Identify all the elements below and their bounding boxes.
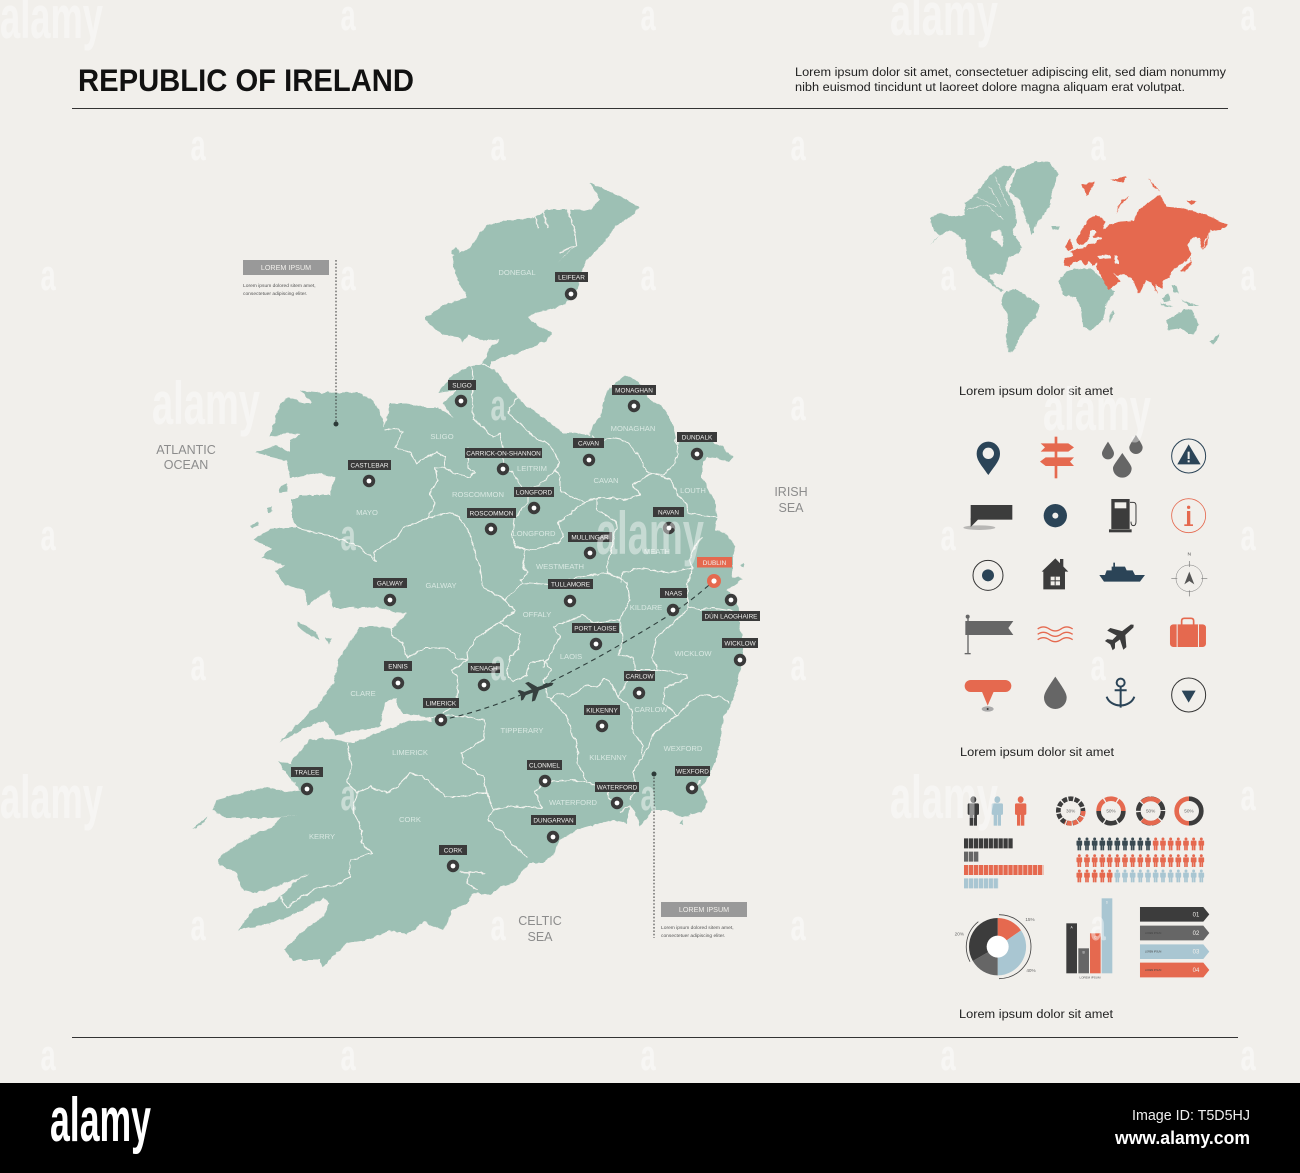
pin: Navan: NAVAN [658, 510, 679, 516]
footer image id: Image ID: T5D5HJ [1132, 1107, 1250, 1124]
caption: world map: Lorem ipsum dolor sit amet [959, 384, 1114, 398]
icon: info [1172, 499, 1206, 533]
stock watermarks: a [191, 900, 206, 950]
county labels: LIMERICK [392, 748, 428, 757]
numbered arrow list: 04 [1193, 968, 1200, 974]
pin: Carlow [624, 671, 655, 699]
county labels: LOUTH [680, 486, 706, 495]
world map [930, 162, 1228, 352]
pin: Naas: NAAS [665, 590, 682, 598]
county labels: WESTMEATH [536, 562, 584, 571]
pin: Tralee [291, 767, 323, 795]
inland seas [1097, 255, 1119, 265]
pin: Roscommon: ROSCOMMON [470, 510, 514, 518]
stock watermarks: a [491, 640, 506, 690]
header description text: Lorem ipsum dolor sit amet, consectetuer adipiscing elit, sed diam nonummy [795, 65, 1227, 79]
county labels [309, 268, 712, 841]
icon: ship [1099, 563, 1145, 582]
stock watermarks: alamy [596, 500, 704, 567]
ring chart: 50% [1099, 799, 1123, 823]
islands [192, 247, 744, 829]
pin: Mullingar [568, 532, 612, 559]
numbered arrow list: 03 [1193, 950, 1200, 956]
stock watermarks: alamy [1043, 376, 1151, 443]
numbered arrow list: LOREM IPSUM [1145, 933, 1161, 935]
pin: Monaghan: MONAGHAN [615, 388, 653, 394]
sea labels: OCEAN [164, 458, 208, 472]
county labels: CARLOW [634, 705, 668, 714]
coastal inlets [460, 212, 700, 890]
icon: signpost [1040, 437, 1074, 478]
stock watermarks: a [1241, 250, 1256, 300]
stock watermarks: a [941, 250, 956, 300]
plane on route [516, 674, 557, 705]
icon: target [973, 560, 1003, 590]
icon: suitcase [1170, 618, 1206, 647]
ring chart: 50% alternate: 50% [1146, 809, 1155, 814]
segmented bars [964, 843, 1043, 883]
pin: Dun Laoghaire: DÚN LAOGHAIRE [705, 612, 757, 620]
pin: Wexford: WEXFORD [676, 768, 709, 776]
pin: Leifear [555, 272, 588, 300]
pie chart [955, 915, 1036, 979]
pin: Cavan: CAVAN [578, 440, 599, 448]
county borders [280, 364, 738, 908]
column chart: A [1071, 926, 1074, 930]
pin: Carrick-on-Shannon [465, 448, 542, 475]
pin: Dungarvan [531, 815, 576, 843]
pin: Tralee: TRALEE [295, 770, 319, 776]
pin: Dublin (capital) [697, 557, 732, 588]
pin: Naas [660, 588, 687, 616]
icon: house [1042, 558, 1068, 589]
stock watermarks: a [641, 1030, 656, 1080]
flight route [441, 581, 714, 720]
sea labels: CELTIC [518, 914, 562, 928]
county labels: CAVAN [593, 476, 619, 485]
pin: Clonmel [527, 760, 562, 787]
pin: Port Laoise [572, 623, 619, 650]
city pins [291, 272, 760, 872]
pin: Cork [439, 845, 467, 872]
column chart: D [1106, 901, 1109, 905]
column chart: LOREM IPSUM [1080, 976, 1101, 980]
infographics set [955, 796, 1209, 980]
pin: Dublin (capital): DUBLIN [703, 560, 727, 567]
landmass [213, 183, 743, 968]
ring chart: 50% alternate [1138, 799, 1163, 823]
county labels: CORK [399, 815, 421, 824]
numbered arrow list: LOREM IPSUM [1145, 952, 1161, 954]
caption: icons: Lorem ipsum dolor sit amet [960, 745, 1115, 759]
icon: down arrow [1172, 678, 1206, 712]
icon: waves [1038, 627, 1073, 642]
stock watermarks: a [1241, 1030, 1256, 1080]
pie chart: 20% [955, 932, 964, 937]
pin: Galway [373, 578, 407, 606]
stock watermarks: a [191, 640, 206, 690]
icon: warning [1172, 439, 1206, 473]
stock watermarks: alamy [890, 764, 998, 831]
stock watermarks: a [1241, 770, 1256, 820]
pin: Cavan [573, 438, 604, 466]
pin: Nenagh: NENAGH [470, 666, 498, 672]
stock watermarks: a [791, 380, 806, 430]
footer logo: alamy [50, 1086, 151, 1155]
pin: Waterford: WATERFORD [597, 784, 638, 792]
county labels: WATERFORD [549, 798, 598, 807]
stock watermarks: a [41, 1030, 56, 1080]
icon: disc [1044, 504, 1067, 527]
pie chart: 40% [1026, 968, 1036, 973]
pin: Limerick [423, 698, 459, 726]
people pictogram [1076, 838, 1204, 882]
icon: compass [1171, 552, 1207, 596]
header description text: nibh euismod tincidunt ut laoreet dolore magna aliquam erat volutpat. [795, 80, 1185, 94]
stock watermarks: a [191, 120, 206, 170]
icon grid [963, 435, 1207, 712]
icon: anchor [1107, 679, 1134, 708]
stock watermarks: a [41, 510, 56, 560]
madagascar [1108, 310, 1114, 322]
sea labels: SEA [778, 501, 804, 515]
sea labels: IRISH [774, 485, 808, 499]
callout: south: Lorem ipsum dolored sitem amet, [661, 925, 734, 931]
pin: Port Laoise: PORT LAOISE [574, 626, 617, 632]
county labels: DONEGAL [498, 268, 536, 277]
icon: map marker [965, 680, 1011, 712]
pin: Longford [514, 487, 554, 514]
ring chart: 50% split: 50% [1184, 809, 1194, 814]
county labels: LAOIS [560, 652, 582, 661]
gender figures [968, 796, 1026, 826]
county labels: MEATH [644, 547, 670, 556]
title: REPUBLIC OF IRELAND [78, 62, 414, 98]
pin: Nenagh [468, 663, 500, 691]
pin: Clonmel: CLONMEL [529, 762, 560, 770]
map: Republic of Ireland [192, 183, 744, 968]
caption: infographics: Lorem ipsum dolor sit amet [959, 1007, 1114, 1021]
stock watermarks: a [41, 250, 56, 300]
iceland [1052, 226, 1060, 230]
pin: Castlebar [348, 460, 391, 487]
pin: Waterford [595, 782, 639, 809]
australia and oceania [1152, 285, 1220, 344]
pie chart: 15% [1025, 917, 1035, 922]
stock watermarks: a [941, 1030, 956, 1080]
arctic and island territories [1065, 177, 1208, 272]
ring chart: 50%: 50% [1106, 809, 1116, 814]
icon: airplane [1101, 615, 1142, 655]
pin: Sligo: SLIGO [452, 382, 472, 390]
numbered arrow list: LOREM IPSUM [1145, 970, 1161, 972]
icon: compass: N [1188, 552, 1192, 558]
sea labels: ATLANTIC [156, 443, 216, 457]
icon: location pin [977, 442, 1000, 475]
county labels: WEXFORD [664, 744, 703, 753]
pin: Tullamore [548, 579, 593, 607]
pin: Wexford [675, 766, 710, 794]
stock watermarks: a [1091, 640, 1106, 690]
icon: flag [965, 615, 1013, 654]
county labels: SLIGO [430, 432, 454, 441]
stock watermarks: alamy [152, 370, 260, 437]
header description text [795, 65, 1227, 94]
eurasia [1064, 195, 1228, 294]
county labels: CLARE [350, 689, 376, 698]
column chart [1066, 898, 1112, 980]
pin: Dun Laoghaire [702, 594, 760, 621]
pin: Longford: LONGFORD [516, 490, 552, 496]
footer bar [0, 1083, 1300, 1173]
stock watermarks: alamy [0, 764, 103, 831]
ring chart: 30% [1058, 799, 1083, 823]
column chart: C [1094, 936, 1097, 940]
callout: south [652, 772, 747, 939]
county labels: WICKLOW [674, 649, 712, 658]
county labels: MAYO [356, 508, 378, 517]
stock watermarks: a [341, 770, 356, 820]
icon: fuel pump [1109, 499, 1136, 532]
county labels: OFFALY [523, 610, 551, 619]
pin: Dungarvan: DUNGARVAN [533, 818, 574, 824]
county labels: KILKENNY [589, 753, 627, 762]
pin: Carrick-on-Shannon: CARRICK-ON-SHANNON [466, 450, 541, 458]
pin: Dundalk: DUNDALK [682, 434, 713, 442]
ring chart: 30%: 30% [1066, 809, 1075, 814]
pin: Monaghan [612, 385, 656, 412]
north america [930, 165, 1022, 293]
africa [1058, 268, 1115, 331]
stock watermarks: a [791, 900, 806, 950]
stock watermarks: a [341, 250, 356, 300]
numbered arrow list [1140, 907, 1209, 977]
stock watermarks: a [791, 640, 806, 690]
callout: north [243, 260, 338, 426]
stock watermarks: a [791, 120, 806, 170]
column chart: B [1083, 951, 1086, 955]
pin: Wicklow: WICKLOW [724, 640, 757, 648]
ring chart: 50% split [1177, 799, 1201, 823]
numbered arrow list: 02 [1193, 931, 1200, 937]
stock watermarks: a [491, 380, 506, 430]
pin: Kilkenny: KILKENNY [586, 708, 619, 714]
callout: north: Lorem ipsum dolored sitem amet, [243, 283, 316, 289]
pin: Roscommon [467, 508, 516, 535]
pin: Limerick: LIMERICK [426, 700, 457, 708]
pin: Leifear: LEIFEAR [558, 274, 585, 282]
stock watermarks: a [941, 510, 956, 560]
pin: Wicklow [722, 638, 758, 666]
pin: Carlow: CARLOW [625, 674, 654, 680]
pin: Sligo [448, 380, 476, 407]
numbered arrow list: 01 [1193, 912, 1200, 918]
pin: Dundalk [677, 432, 717, 460]
south america [1002, 288, 1040, 352]
stock watermarks: a [641, 770, 656, 820]
stock watermarks: a [1091, 120, 1106, 170]
icon: large drop [1044, 677, 1067, 709]
county labels: KILDARE [630, 603, 662, 612]
callout: south: consectetuer adipiscing eliter. [661, 933, 725, 939]
stock watermarks: a [491, 120, 506, 170]
pin: Galway: GALWAY [377, 580, 404, 588]
footer url: www.alamy.com [1114, 1128, 1250, 1148]
county labels: GALWAY [425, 581, 457, 590]
stock watermarks: a [341, 510, 356, 560]
stock watermarks: a [1091, 900, 1106, 950]
pin: Ennis [384, 661, 412, 689]
callout: north: consectetuer adipiscing eliter. [243, 291, 307, 297]
county labels: LEITRIM [517, 464, 547, 473]
icon: speech flag [963, 505, 1012, 530]
pin: Ennis: ENNIS [388, 664, 408, 670]
pin: Tullamore: TULLAMORE [551, 582, 590, 588]
callout: north: LOREM IPSUM [261, 263, 311, 272]
county labels: TIPPERARY [501, 726, 543, 735]
county labels: LONGFORD [512, 529, 556, 538]
stock watermarks: a [641, 250, 656, 300]
county labels: ROSCOMMON [452, 490, 504, 499]
icon: water drops [1102, 435, 1143, 478]
sea labels [156, 443, 808, 944]
sea labels: SEA [527, 930, 553, 944]
pin: Navan [653, 507, 684, 534]
callout: south: LOREM IPSUM [679, 905, 729, 914]
pin: Castlebar: CASTLEBAR [350, 462, 389, 470]
stock watermarks: a [491, 900, 506, 950]
county labels: MONAGHAN [611, 424, 655, 433]
county labels: KERRY [309, 832, 335, 841]
greenland [1008, 162, 1058, 235]
hudson bay and arctic channels [991, 230, 1003, 247]
stock watermarks: a [341, 1030, 356, 1080]
pin: Cork: CORK [444, 848, 463, 854]
pin: Mullingar: MULLINGAR [571, 534, 609, 542]
pin: Kilkenny [584, 705, 620, 732]
stock watermarks: a [1241, 510, 1256, 560]
